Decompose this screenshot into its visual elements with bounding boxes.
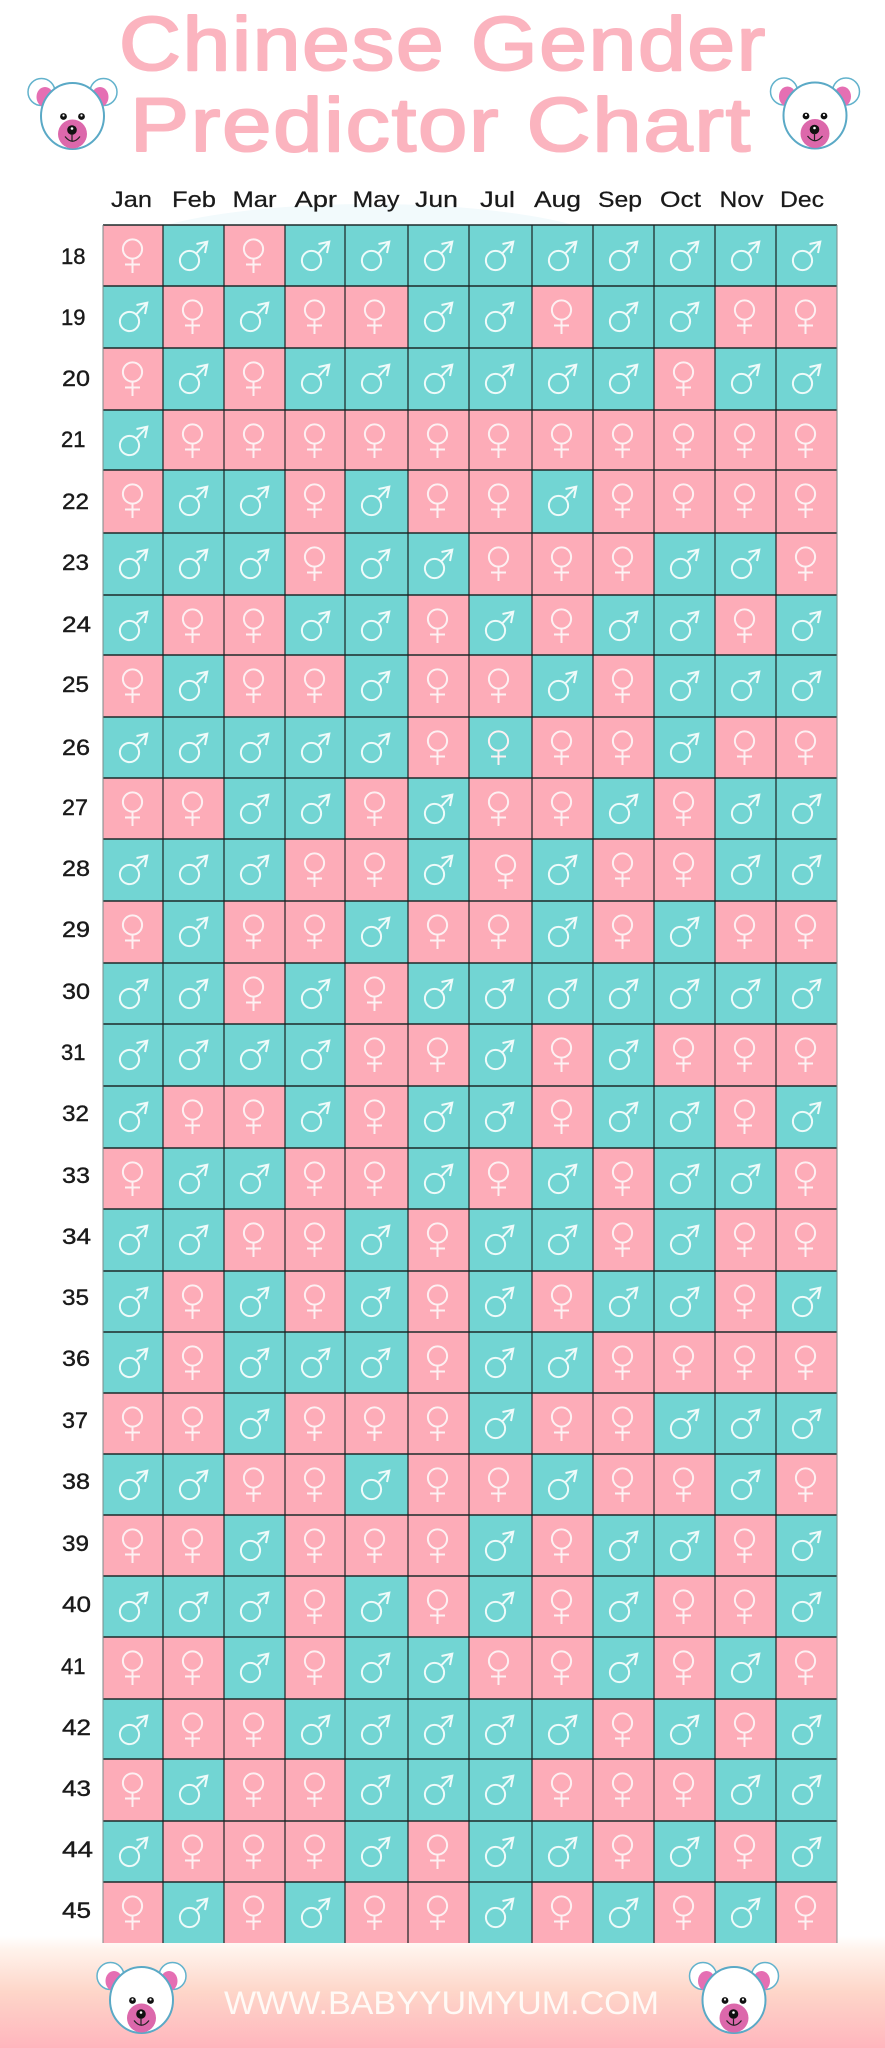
month headers: Nov bbox=[720, 187, 764, 212]
footer gradient band bbox=[0, 1936, 885, 2048]
row age 37 bbox=[103, 1393, 839, 1456]
row age 43 bbox=[103, 1759, 839, 1822]
row age 30 bbox=[103, 963, 839, 1026]
row age 35 bbox=[103, 1271, 839, 1334]
row age 32 bbox=[103, 1086, 839, 1149]
row age 27 bbox=[103, 778, 839, 841]
age labels: 43 bbox=[62, 1776, 91, 1801]
chart: gender grid bbox=[103, 225, 839, 1945]
age labels: 36 bbox=[62, 1346, 90, 1371]
row age 24 bbox=[103, 595, 839, 658]
age labels: 31 bbox=[61, 1040, 85, 1065]
age labels: 35 bbox=[62, 1285, 89, 1310]
month headers: Jul bbox=[480, 187, 515, 212]
row age 21 bbox=[103, 410, 839, 473]
title: Predictor Chart bbox=[130, 83, 752, 168]
month headers: Feb bbox=[172, 187, 216, 212]
age labels: 41 bbox=[61, 1654, 85, 1679]
row age 39 bbox=[103, 1515, 839, 1578]
row age 20 bbox=[103, 348, 839, 411]
age labels: 29 bbox=[62, 917, 90, 942]
row age 44 bbox=[103, 1821, 839, 1884]
row age 22 bbox=[103, 470, 839, 533]
month headers: Jun bbox=[415, 187, 458, 212]
age labels: 22 bbox=[62, 489, 89, 514]
row age 42 bbox=[103, 1699, 839, 1762]
icon: bear bottom right bbox=[690, 1962, 778, 2033]
age labels: 26 bbox=[62, 735, 90, 760]
month headers: Dec bbox=[780, 187, 824, 212]
icon: bear top right bbox=[770, 78, 860, 148]
title: Chinese Gender bbox=[119, 2, 767, 87]
row age 26 bbox=[103, 717, 839, 780]
row age 18 bbox=[103, 225, 839, 288]
month headers: May bbox=[352, 187, 400, 212]
icon: bear bottom left bbox=[97, 1962, 186, 2033]
age labels: 32 bbox=[62, 1101, 89, 1126]
age labels: 30 bbox=[62, 979, 90, 1004]
month headers: Aug bbox=[534, 187, 581, 212]
row age 31 bbox=[103, 1024, 839, 1087]
row age 34 bbox=[103, 1209, 839, 1272]
row age 33 bbox=[103, 1148, 839, 1211]
row age 40 bbox=[103, 1576, 839, 1639]
age labels: 25 bbox=[62, 672, 89, 697]
age labels: 37 bbox=[62, 1408, 88, 1433]
age labels: 38 bbox=[62, 1469, 90, 1494]
row age 38 bbox=[103, 1454, 839, 1517]
age labels: 28 bbox=[62, 856, 90, 881]
row age 45 bbox=[103, 1882, 839, 1945]
row age 36 bbox=[103, 1332, 839, 1395]
footer website text: WWW.BABYYUMYUM.COM bbox=[224, 1985, 659, 2021]
age labels: 34 bbox=[62, 1224, 91, 1249]
row age 19 bbox=[103, 286, 839, 349]
month headers bbox=[111, 187, 824, 212]
age labels: 27 bbox=[62, 795, 88, 820]
age labels: 44 bbox=[62, 1837, 93, 1862]
row age 23 bbox=[103, 533, 839, 596]
age labels: 24 bbox=[62, 612, 91, 637]
month headers: Apr bbox=[294, 187, 337, 212]
age labels: 19 bbox=[61, 305, 85, 330]
age labels: 39 bbox=[62, 1531, 89, 1556]
age labels: 20 bbox=[62, 366, 90, 391]
row age 28 bbox=[103, 839, 839, 902]
month headers: Mar bbox=[232, 187, 276, 212]
month headers: Jan bbox=[111, 187, 152, 212]
age labels: 23 bbox=[62, 550, 89, 575]
age labels: 18 bbox=[61, 244, 85, 269]
age labels: 40 bbox=[62, 1592, 91, 1617]
month headers: Oct bbox=[660, 187, 701, 212]
age labels bbox=[61, 244, 93, 1923]
month headers: Sep bbox=[598, 187, 642, 212]
row age 29 bbox=[103, 901, 839, 964]
title bbox=[119, 2, 767, 168]
age labels: 45 bbox=[62, 1898, 91, 1923]
row age 25 bbox=[103, 655, 839, 718]
age labels: 42 bbox=[62, 1715, 91, 1740]
age labels: 21 bbox=[61, 427, 85, 452]
icon: bear top left bbox=[28, 78, 117, 149]
age labels: 33 bbox=[62, 1163, 90, 1188]
row age 41 bbox=[103, 1637, 839, 1700]
